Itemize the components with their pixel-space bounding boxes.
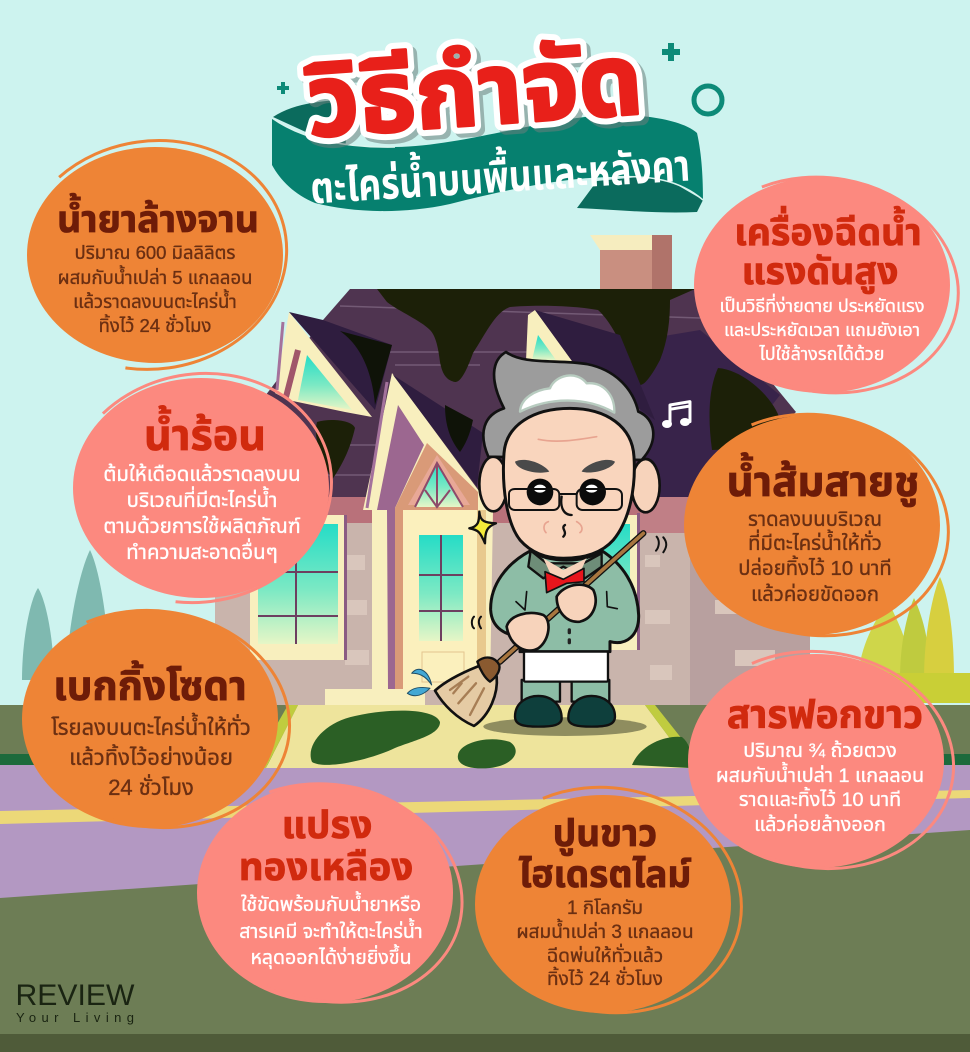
body jacket	[491, 551, 639, 652]
background trees	[22, 550, 970, 703]
heading: เครื่องฉีดน้ำ	[734, 206, 922, 253]
motion lines	[472, 537, 666, 628]
house	[215, 235, 810, 705]
moss on walkway	[311, 711, 691, 768]
left window	[250, 515, 347, 660]
left gable	[275, 312, 392, 417]
legs	[522, 680, 609, 702]
body text: 24 ชั่วโมง	[108, 773, 194, 800]
eyes	[527, 479, 553, 505]
panel: hydrated lime	[457, 766, 759, 1034]
logo: REVIEW	[16, 979, 135, 1012]
hair	[483, 352, 653, 460]
body text: ราดลงบนบริเวณ	[748, 509, 882, 531]
nose and mouth	[561, 497, 572, 537]
body text: ผสมกับน้ำเปล่า 5 แกลลอน	[58, 265, 252, 288]
body text: ไปใช้ล้างรถได้ด้วย	[759, 344, 884, 364]
right gable	[526, 310, 655, 420]
body text: ฉีดพ่นให้ทั่วแล้ว	[547, 943, 663, 967]
title: วิธีกำจัด	[303, 24, 646, 159]
collar	[528, 551, 602, 578]
centre gable and door	[363, 373, 493, 690]
bow tie	[545, 568, 584, 593]
panel: pressure washer	[676, 157, 970, 413]
heading: ปูนขาว	[553, 813, 657, 856]
logo: Your Living	[16, 1010, 134, 1025]
body text: ต้มให้เดือดแล้วราดลงบน	[103, 462, 301, 486]
sparkle	[469, 512, 496, 543]
shoes	[515, 696, 615, 727]
hands	[507, 613, 549, 651]
heading: น้ำยาล้างจาน	[57, 193, 259, 240]
music note dots	[662, 418, 690, 428]
decorative plus and ring	[277, 43, 722, 114]
ribbon banner	[272, 100, 703, 213]
body text: ปล่อยทิ้งไว้ 10 นาที	[738, 555, 892, 580]
heading: สารฟอกขาว	[727, 694, 923, 737]
heading: แปรง	[282, 804, 372, 847]
title: วิธีกำจัด	[303, 24, 646, 159]
heading: น้ำส้มสายชู	[727, 452, 919, 507]
water droplets	[407, 669, 432, 696]
body text: แล้วทิ้งไว้อย่างน้อย	[69, 743, 233, 770]
body text: ทำความสะอาดอื่นๆ	[126, 538, 278, 564]
body text: ปริมาณ 600 มิลลิลิตร	[75, 242, 235, 263]
panel: vinegar	[666, 394, 966, 656]
walkway	[252, 705, 705, 768]
buttons	[564, 630, 574, 643]
heading: เบกกิ้งโซดา	[53, 660, 247, 709]
heading: ไฮเดรตไลม์	[519, 854, 692, 895]
heading: แรงดันสูง	[742, 250, 898, 294]
body text: ทิ้งไว้ 24 ชั่วโมง	[547, 966, 663, 990]
body text: ตามด้วยการใช้ผลิตภัณฑ์	[103, 514, 301, 538]
eyebrows	[515, 460, 615, 473]
body text: 1 กิโลกรัม	[567, 898, 643, 919]
roof moss	[316, 289, 780, 480]
body text: ผสมกับน้ำเปล่า 1 แกลลอน	[716, 762, 924, 787]
title: วิธีกำจัด	[307, 28, 650, 163]
body text: บริเวณที่มีตะไคร่น้ำ	[127, 486, 277, 512]
panel: bleach	[672, 634, 968, 886]
body text: โรยลงบนตะไคร่น้ำให้ทั่ว	[51, 712, 251, 740]
chimney	[590, 235, 672, 292]
glasses	[509, 489, 622, 510]
body text: เป็นวิธีที่ง่ายดาย ประหยัดแรง	[720, 293, 924, 316]
roof shading and shingle lines	[320, 306, 780, 497]
apron	[524, 652, 608, 682]
sleeve creases	[516, 592, 617, 610]
right window behind character	[590, 513, 640, 650]
broom head	[435, 666, 497, 726]
house walls	[215, 497, 810, 705]
body text: แล้วค่อยขัดออก	[751, 583, 879, 606]
body text: ใช้ขัดพร้อมกับน้ำยาหรือ	[241, 891, 421, 916]
body text: สารเคมี จะทำให้ตะไคร่น้ำ	[239, 918, 423, 943]
ears	[479, 457, 507, 511]
body text: แล้วค่อยล้างออก	[754, 813, 886, 836]
face	[503, 408, 634, 558]
body text: ปริมาณ ¾ ถ้วยตวง	[743, 739, 897, 762]
character: old man sweeping	[407, 352, 690, 736]
heading: น้ำร้อน	[144, 405, 266, 460]
panel: baking soda	[6, 593, 304, 845]
body text: ที่มีตะไคร่น้ำให้ทั่ว	[748, 529, 882, 555]
music note	[670, 402, 690, 423]
body text: และประหยัดเวลา แถมยังเอา	[724, 320, 920, 340]
subtitle: ตะไคร่น้ำบนพื้นและหลังคา	[309, 134, 691, 214]
ground and road	[0, 705, 970, 1052]
front step	[325, 689, 425, 705]
heading: ทองเหลือง	[239, 846, 413, 889]
panel: dish soap	[4, 123, 302, 387]
maid headband	[520, 375, 614, 413]
panel: brass brush	[177, 760, 483, 1026]
body text: ทิ้งไว้ 24 ชั่วโมง	[99, 314, 211, 336]
body text: แล้วราดลงบนตะไคร่น้ำ	[73, 289, 237, 312]
broom handle	[500, 533, 643, 662]
body text: หลุดออกได้ง่ายยิ่งขึ้น	[250, 944, 412, 969]
panel: hot water	[48, 353, 350, 623]
body text: ราดและทิ้งไว้ 10 นาที	[739, 787, 901, 811]
main roof	[262, 289, 796, 497]
body text: ผสมน้ำเปล่า 3 แกลลอน	[516, 918, 694, 943]
shadow	[483, 717, 647, 736]
